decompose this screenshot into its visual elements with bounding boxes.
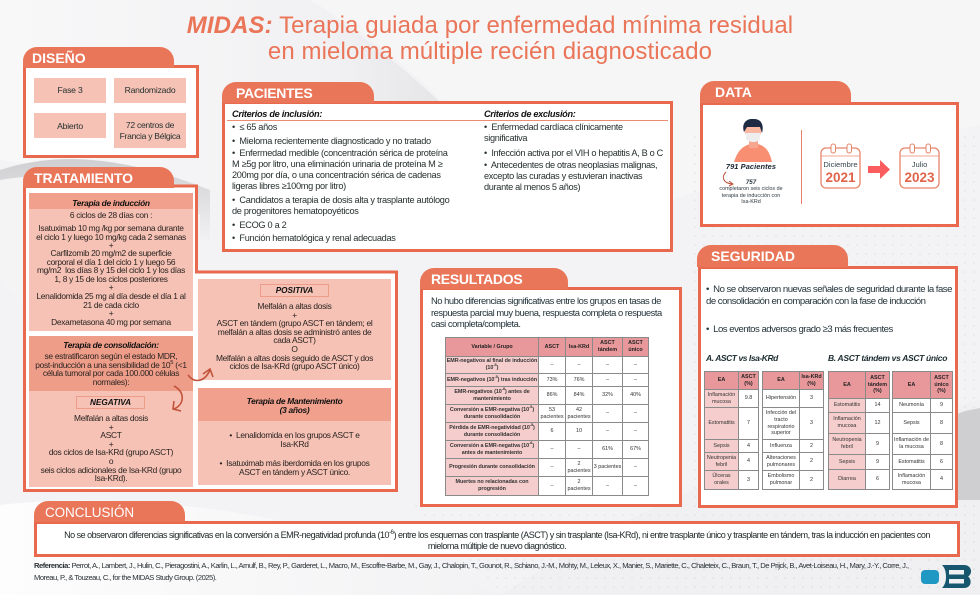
badge: positiva: POSITIVA: [276, 286, 313, 295]
title: MIDAS: Terapia guiada por enfermedad mínima residual: [187, 12, 793, 39]
positive MRD block: Melfalán a altas dosis seguido de ASCT y dos: [216, 353, 373, 363]
table B: ASCT tándem: Inflamación mucosa: [833, 416, 861, 429]
text: 791 pacientes: 791 Pacientes: [726, 162, 776, 171]
heading: conclusión: CONCLUSIÓN: [45, 505, 134, 520]
heading: conclusión: [34, 501, 185, 522]
icon: calendar december 2021: 2021: [825, 170, 856, 185]
conclusion text: [64, 529, 930, 551]
design tag: abierto: [34, 113, 106, 138]
exclusion criteria: significativa: [484, 133, 527, 143]
table B: ASCT único: Inflamación mucosa: [898, 473, 925, 486]
results table: –: [606, 410, 609, 416]
results table: 84%: [574, 392, 584, 398]
induction therapy block: [29, 193, 193, 331]
results table: –: [634, 377, 637, 383]
results table: 76%: [574, 377, 584, 383]
results table: –: [606, 428, 609, 434]
results table: –: [634, 483, 637, 489]
induction therapy block: 1, 8 y 15 de los ciclos posteriores: [54, 274, 168, 284]
table A: ASCT: 4: [747, 443, 750, 449]
maintenance therapy block: [198, 388, 391, 485]
results table: –: [606, 377, 609, 383]
results table: Muertes no relacionadas con progresión: [456, 479, 528, 492]
safety summary: de consolidación en comparación con la fase de inducción: [706, 296, 925, 307]
results table: –: [550, 483, 554, 489]
consolidation therapy block: +: [109, 439, 113, 449]
table A: Isa-KRd: Alteraciones pulmonares: [766, 455, 796, 468]
induction therapy block: Isatuximab 10 mg /kg por semana durante: [38, 223, 184, 233]
table A: Isa-KRd: [762, 371, 824, 490]
results table: –: [634, 464, 637, 470]
inclusion criteria: 200mg por día, o una concentración sérica de cadenas: [232, 170, 441, 180]
design tag: fase 3: [34, 78, 106, 103]
table A: ASCT: 9.8: [745, 395, 752, 401]
inclusion criteria: Criterios de inclusión:: [232, 109, 322, 119]
table A: ASCT: [704, 371, 759, 490]
consolidation therapy block: dos ciclos de Isa-KRd (grupo ASCT): [49, 447, 173, 457]
maintenance therapy block: Isa-KRd: [280, 439, 309, 449]
table B: ASCT único: 8: [940, 420, 943, 426]
table A: Isa-KRd: Embolismo pulmonar: [768, 473, 794, 486]
table A: Isa-KRd: 2: [810, 477, 813, 483]
positive MRD block: cada ASCT): [273, 335, 316, 345]
results table: ASCT tándem: [598, 340, 617, 353]
panel: pacientes: [222, 82, 673, 252]
safety summary: [706, 284, 952, 335]
table B: ASCT único: [892, 371, 953, 490]
heading: tratamiento: [23, 167, 174, 188]
results table: –: [634, 362, 637, 368]
exclusion criteria: excepto las curadas y estuvieran inactivas: [484, 171, 642, 181]
maintenance therapy block: ASCT en tándem y ASCT único.: [239, 467, 350, 477]
heading: diseño: [23, 47, 174, 68]
results table: –: [606, 362, 609, 368]
maintenance therapy block: (3 años): [280, 405, 309, 415]
table B: ASCT único: 9: [940, 402, 943, 408]
text: 757 completed: terapia de inducción con: [722, 193, 780, 199]
induction therapy block: +: [109, 240, 113, 250]
text: 757 completed: 757: [746, 179, 756, 186]
results table: EMR-negativos (10-5) tras inducción: [447, 375, 537, 383]
exclusion criteria: • Antecedentes de otras neoplasias malignas,: [484, 160, 657, 170]
table B: ASCT único: Inflamación de la mucosa: [894, 437, 929, 450]
table A: ASCT: 3: [747, 477, 750, 483]
table B: ASCT único: 4: [940, 476, 943, 482]
panel: conclusión: [34, 501, 960, 557]
results table: 6: [550, 428, 554, 434]
panel: resultados: [420, 268, 682, 507]
positive MRD block: Melfalán a altas dosis: [258, 301, 331, 311]
exclusion criteria: • Infección activa por el VIH o hepatitis A, B o C: [484, 148, 663, 158]
design tag: fase 3: Fase 3: [57, 85, 83, 95]
results table: Variable / Grupo: [471, 344, 513, 350]
results table: Conversión a EMR-negativa (10-6) antes de mantenimiento: [450, 441, 534, 456]
table A: ASCT: Estomatitis: [708, 420, 735, 426]
icon: calendar july 2023: Julio: [912, 160, 927, 169]
positive MRD block: +: [292, 310, 297, 320]
induction therapy block: Dexametasona 40 mg por semana: [51, 317, 171, 327]
arrow: timeline: [868, 160, 890, 179]
badge: positiva: [260, 284, 329, 297]
reference: [34, 561, 909, 582]
table A: Isa-KRd: Isa-KRd (%): [801, 374, 822, 386]
table B: ASCT tándem: Sepsis: [839, 459, 855, 465]
table B: ASCT tándem: EA: [843, 382, 851, 388]
table B: ASCT único: Neumonía: [899, 402, 924, 408]
conclusion text: mieloma múltiple de nuevo diagnóstico.: [428, 541, 566, 551]
results table: EMR-negativos al final de inducción (10-5): [447, 358, 537, 371]
table B: ASCT tándem: 14: [874, 402, 880, 408]
results table: 42 pacientes: [567, 407, 591, 420]
results table: Pérdida de EMR-negatividad (10-5) durante consolidación: [449, 423, 535, 438]
panel: data: [700, 81, 959, 227]
positive MRD block: O: [291, 344, 298, 354]
inclusion criteria: M ≥5g por litro, una eliminación urinaria de proteína M ≥: [232, 159, 443, 169]
badge: negativa: NEGATIVA: [90, 398, 131, 407]
table B: ASCT único: 6: [940, 459, 943, 465]
results table: EMR-negativos (10-6) antes de mantenimiento: [454, 387, 530, 402]
safety summary: • Los eventos adversos grado ≥3 más frecuentes: [706, 324, 893, 335]
badge: negativa: [76, 396, 145, 409]
heading: tratamiento: TRATAMIENTO: [34, 170, 133, 186]
results table: 73%: [547, 377, 557, 383]
table A: Isa-KRd: 3: [810, 420, 813, 426]
results table: –: [578, 362, 580, 368]
induction therapy block: Terapia de inducción: [72, 198, 150, 208]
results table: –: [550, 446, 554, 452]
heading: seguridad: SEGURIDAD: [711, 248, 795, 264]
heading: pacientes: PACIENTES: [236, 85, 312, 101]
inclusion criteria: ligeras libres ≥100mg por litro): [232, 181, 346, 191]
consolidation therapy block: se estratificaron según el estado MDR,: [45, 351, 177, 361]
consolidation therapy block: Melfalán a altas dosis: [74, 413, 148, 423]
table B: ASCT tándem: Diarrea: [838, 476, 856, 482]
results table: –: [550, 464, 554, 470]
results table: 3 pacientes: [594, 464, 621, 470]
table B: ASCT tándem: ASCT tándem (%): [868, 375, 887, 394]
inclusion criteria: • Candidatos a terapia de dosis alta y trasplante autólogo: [232, 195, 449, 205]
reference: Referencia: Perrot, A., Lambert, J., Hulin, C., Pieragostini, A., Karlin, L., Arnulf, B., Rey, P., Garderet, L., Macro, M., Escoffre-Barbe, M., Gay, J., Chalopin, T., Gounot, R., Schiano, J.-M., Mohty, M., Leleux, X., Manier, S., Mariette, C., Chaleteix, C., Braun, T., De Prijck, B., Avet-Loiseau, H., Mary, J.-Y., Corre, J.,: [34, 561, 909, 570]
inclusion criteria: • ECOG 0 a 2: [232, 220, 286, 230]
exclusion criteria: • Enfermedad cardíaca clínicamente: [484, 122, 623, 132]
table B: ASCT único: 8: [940, 441, 943, 447]
positive MRD block: ASCT en tándem (grupo ASCT en tándem; el: [217, 318, 372, 328]
results summary: No hubo diferencias significativas entre los grupos en tasas de: [431, 295, 661, 306]
results table: Progresión durante consolidación: [449, 464, 535, 470]
design tag: centros: Francia y Bélgica: [120, 131, 180, 141]
results table: 86%: [547, 392, 557, 398]
heading: diseño: DISEÑO: [32, 50, 86, 66]
table A: Isa-KRd: 3: [810, 395, 813, 401]
reference: Moreau, P., & Touzeau, C., for the MIDAS Study Group. (2025).: [34, 572, 216, 582]
text: 757 completed: Isa-KRd: [741, 199, 761, 205]
results table: 40%: [630, 392, 641, 398]
title: en mieloma múltiple recién diagnosticado: [268, 38, 712, 64]
consolidation therapy block: seis ciclos adicionales de Isa-KRd (grupo: [41, 465, 181, 475]
consolidation therapy block: célula tumoral por cada 100.000 células: [43, 368, 179, 378]
induction therapy block: mg/m2 los días 8 y 15 del ciclo 1 y los días: [37, 265, 185, 275]
consolidation therapy block: Terapia de consolidación:: [63, 340, 159, 350]
results table: ASCT: [545, 344, 559, 350]
consolidation therapy block: Isa-KRd).: [95, 473, 127, 483]
table A: ASCT: Úlceras orales: [712, 473, 731, 486]
induction therapy block: 21 de cada ciclo: [83, 300, 139, 310]
induction therapy block: +: [109, 308, 113, 318]
table A: ASCT: Inflamación mucosa: [708, 392, 735, 404]
heading: seguridad: [697, 245, 848, 267]
design tag: centros: [114, 113, 186, 148]
results table: ASCT único: [628, 340, 643, 353]
maintenance therapy block: • Lenalidomida en los grupos ASCT e: [229, 430, 360, 440]
results table: –: [634, 410, 637, 416]
heading: resultados: RESULTADOS: [431, 271, 522, 287]
results table: –: [634, 428, 637, 434]
induction therapy block: Lenalidomida 25 mg al día desde el día 1 al: [36, 291, 186, 301]
design tag: centros: 72 centros de: [126, 120, 174, 130]
results table: 2 pacientes: [567, 461, 591, 474]
exclusion criteria: Criterios de exclusión:: [484, 109, 575, 119]
induction therapy block: Carfilzomib 20 mg/m2 de superficie: [50, 248, 172, 258]
table A: Isa-KRd: Infección del tracto respiratorio superior: [766, 410, 796, 436]
maintenance therapy block: Terapia de Mantenimiento: [247, 396, 342, 406]
results table: 67%: [630, 446, 641, 452]
title: [187, 12, 793, 64]
table B: ASCT tándem: 9: [876, 459, 879, 465]
induction therapy block: +: [109, 282, 113, 292]
heading: data: DATA: [715, 84, 752, 100]
induction therapy block: 6 ciclos de 28 días con :: [70, 210, 152, 220]
consolidation therapy block: ASCT: [100, 430, 122, 440]
results table: 53 pacientes: [540, 407, 564, 420]
results table: Conversión a EMR-negativa (10-5) durante consolidación: [450, 405, 534, 420]
induction therapy block: corporal el día 1 del ciclo 1 y luego 56: [47, 257, 175, 267]
arrow: to negative: [172, 385, 183, 412]
results table: 61%: [602, 446, 613, 452]
results summary: [431, 295, 662, 329]
results table: 32%: [602, 392, 613, 398]
conclusion text: No se observaron diferencias significativas en la conversión a EMR-negatividad profunda (10-6) entre los esquemas con trasplante (ASCT) y sin trasplante (Isa-KRd), ni entre trasplante único y trasplante en tándem, tras la inducción en pacientes con: [64, 529, 930, 540]
inclusion criteria: • Mieloma recientemente diagnosticado y no tratado: [232, 136, 431, 146]
table B: ASCT único: Estomatitis: [898, 459, 925, 465]
results table: 2 pacientes: [567, 479, 591, 492]
maintenance therapy block: • Isatuximab más iberdomida en los grupos: [219, 458, 370, 468]
table A: Isa-KRd: 2: [810, 458, 813, 464]
consolidation therapy block: +: [109, 422, 113, 432]
positive MRD block: ciclos de Isa-KRd (grupo ASCT único): [229, 361, 360, 371]
results table: –: [578, 446, 580, 452]
table A: ASCT: ASCT (%): [741, 374, 756, 386]
results summary: respuesta parcial muy buena, respuesta completa o respuesta: [431, 307, 662, 318]
table B: ASCT único: ASCT único (%): [934, 375, 949, 394]
design tag: abierto: Abierto: [57, 121, 83, 131]
table A: ASCT: Neutropenia febril: [707, 455, 736, 468]
table A: Isa-KRd: Hipertensión: [766, 395, 796, 401]
table B: ASCT único: EA: [908, 382, 915, 388]
inclusion criteria: de progenitores hematopoyéticos: [232, 206, 359, 216]
table B: ASCT tándem: Estomatitis: [834, 402, 860, 408]
results table: –: [606, 483, 609, 489]
table B: ASCT único: Sepsis: [903, 420, 920, 426]
table B: ASCT tándem: 12: [874, 420, 880, 426]
arrow: patients curve: [722, 172, 734, 186]
heading: pacientes: [222, 82, 374, 103]
consolidation therapy block: [29, 336, 193, 487]
results table: –: [550, 362, 554, 368]
icon: patient with mask: [734, 119, 772, 162]
inclusion criteria: • Enfermedad medible (concentración sérica de proteína: [232, 148, 448, 158]
heading: table B: B. ASCT tándem vs ASCT único: [828, 353, 947, 363]
consolidation therapy block: normales):: [93, 377, 129, 387]
icon: calendar december 2021: Diciembre: [823, 160, 858, 169]
heading: data: [700, 81, 851, 103]
results summary: casi completa/completa.: [431, 318, 521, 329]
panel: tratamiento: [23, 167, 398, 492]
design tag: randomizado: [114, 78, 186, 103]
exclusion criteria: [484, 109, 663, 192]
table B: ASCT tándem: Neutropenia febril: [832, 437, 862, 450]
consolidation therapy block: o: [109, 456, 113, 466]
table A: ASCT: 4: [747, 458, 750, 464]
icon: logo: [921, 565, 971, 588]
text: 757 completed: [719, 179, 783, 205]
table A: ASCT: Sepsis: [713, 443, 730, 449]
positive MRD block: [198, 279, 391, 380]
results table: [445, 337, 649, 496]
table A: Isa-KRd: Influenza: [770, 443, 792, 449]
inclusion criteria: • Función hematológica y renal adecuadas: [232, 233, 396, 243]
inclusion criteria: [232, 109, 450, 243]
text: 757 completed: completaron seis ciclos de: [719, 186, 783, 192]
panel: diseño: [23, 47, 199, 158]
table B: ASCT tándem: 9: [876, 441, 879, 447]
icon: calendar july 2023: 2023: [904, 170, 935, 185]
positive MRD block: melfalán a altas dosis se administró antes de: [218, 327, 371, 337]
induction therapy block: el ciclo 1 y luego 10 mg/kg cada 2 semanas: [36, 232, 186, 242]
heading: resultados: [420, 268, 568, 289]
table A: ASCT: EA: [718, 377, 725, 383]
panel: seguridad: [697, 245, 958, 508]
inclusion criteria: • ≤ 65 años: [232, 122, 277, 132]
heading: table A: A. ASCT vs Isa-KRd: [706, 353, 778, 363]
results table: 10: [576, 428, 582, 434]
results table: Isa-KRd: [569, 344, 589, 350]
safety summary: • No se observaron nuevas señales de seguridad durante la fase: [706, 284, 952, 295]
design tag: randomizado: Randomizado: [125, 85, 175, 95]
icon: calendar july 2023: [899, 144, 940, 189]
table A: Isa-KRd: 2: [810, 443, 813, 449]
table B: ASCT tándem: [828, 371, 890, 490]
consolidation therapy block: post-inducción a una sensibilidad de 105 (<1: [35, 360, 187, 370]
table B: ASCT tándem: 6: [876, 476, 879, 482]
icon: calendar december 2021: [820, 144, 861, 189]
table A: ASCT: 7: [747, 420, 750, 426]
exclusion criteria: durante al menos 5 años): [484, 182, 580, 192]
arrow: to positive: [188, 368, 214, 382]
table A: Isa-KRd: EA: [777, 377, 785, 383]
